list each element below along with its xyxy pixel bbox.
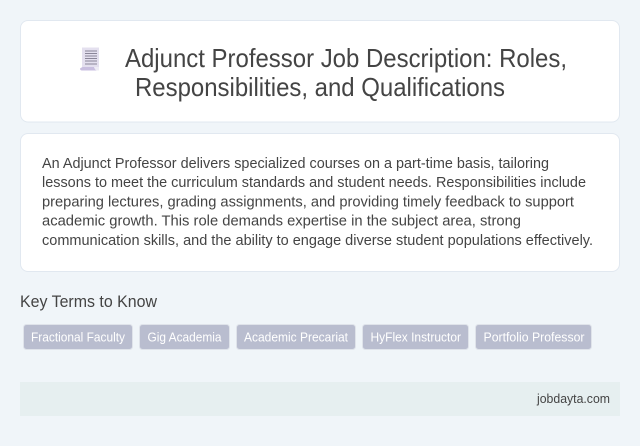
heading: key terms: Key Terms to Know xyxy=(20,293,157,311)
key term tags xyxy=(24,324,592,350)
panel: description xyxy=(20,134,620,272)
tag: Academic Precariat xyxy=(236,324,356,350)
title: Responsibilities, and Qualifications xyxy=(135,74,505,102)
tag: Fractional Faculty xyxy=(24,324,132,350)
tag: Fractional Faculty: Fractional Faculty xyxy=(31,330,126,344)
description text: academic growth. This role demands expertise in the subject area, strong xyxy=(42,214,521,230)
description text xyxy=(42,156,593,249)
footer source: jobdayta.com xyxy=(536,392,610,406)
description text: An Adjunct Professor delivers specialized courses on a part-time basis, tailoring xyxy=(42,156,549,172)
icon: document scroll xyxy=(80,48,99,70)
description text: lessons to meet the curriculum standards and student needs. Responsibilities include xyxy=(42,175,586,191)
tag: Gig Academia: Gig Academia xyxy=(148,330,222,344)
panel: title card xyxy=(20,20,620,122)
footer bar xyxy=(20,382,620,416)
title: Adjunct Professor Job Description: Roles, xyxy=(125,45,567,73)
tag: Academic Precariat: Academic Precariat xyxy=(244,330,348,344)
tag: Portfolio Professor: Portfolio Professor xyxy=(484,330,585,344)
title xyxy=(125,45,567,102)
tag: Portfolio Professor xyxy=(476,324,592,350)
tag: HyFlex Instructor xyxy=(362,324,468,350)
description text: communication skills, and the ability to engage diverse student populations effectively. xyxy=(42,233,593,249)
description text: preparing lectures, grading assignments, and providing timely feedback to support xyxy=(42,194,574,210)
tag: Gig Academia xyxy=(140,324,230,350)
tag: HyFlex Instructor: HyFlex Instructor xyxy=(370,330,462,344)
